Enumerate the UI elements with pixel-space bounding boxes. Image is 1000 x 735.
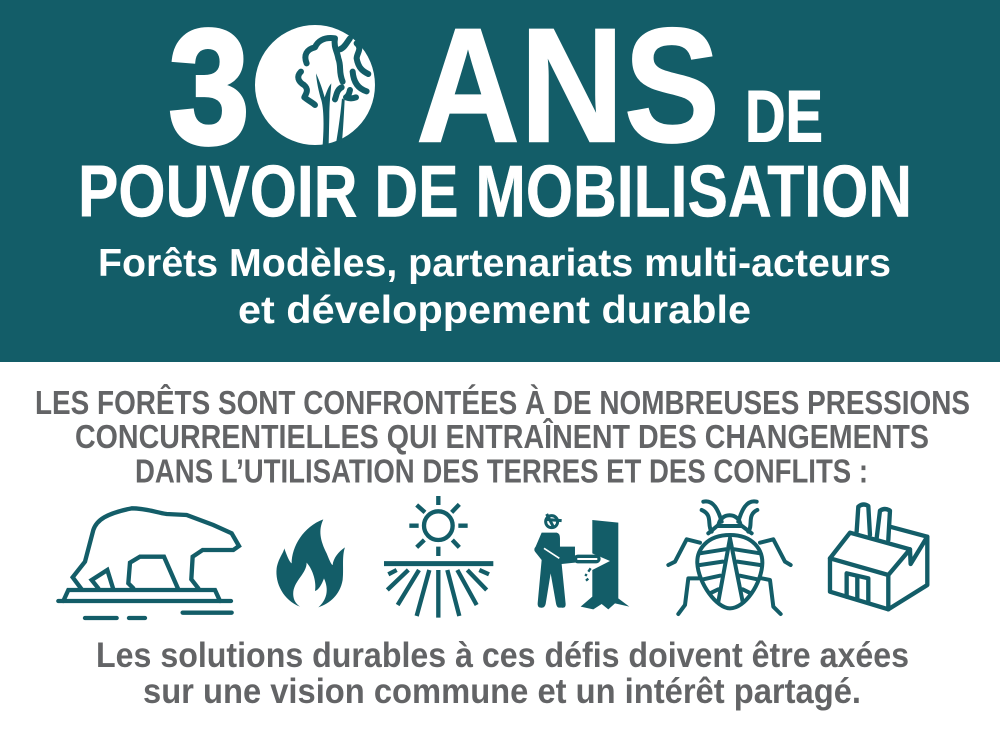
icon: polar bear on ice (58, 508, 239, 618)
conclusion line 2: sur une vision commune et un intérêt partagé. (143, 672, 861, 711)
word DE: DE (745, 76, 823, 158)
icon: sun over cracked ground (384, 496, 493, 618)
icon: zero as forest logo (255, 25, 375, 145)
icon: flame (276, 519, 345, 607)
icon: logger with chainsaw cutting tree (534, 514, 629, 609)
conclusion text block (96, 636, 909, 711)
icon: insect (668, 501, 791, 614)
subtitle (98, 242, 891, 332)
subtitle line 1: Forêts Modèles, partenariats multi-acteurs (98, 242, 891, 285)
conclusion line 1: Les solutions durables à ces défis doivent être axées (96, 636, 909, 675)
pressures text block (35, 384, 970, 490)
header band (0, 0, 1000, 362)
subtitle line 2: et développement durable (238, 289, 751, 332)
title: 30 ans de (168, 0, 823, 178)
pressures line 3: DANS L’UTILISATION DES TERRES ET DES CONFLITS : (135, 452, 868, 490)
icon: factory (830, 504, 927, 609)
digit 3: 3 (168, 0, 250, 178)
